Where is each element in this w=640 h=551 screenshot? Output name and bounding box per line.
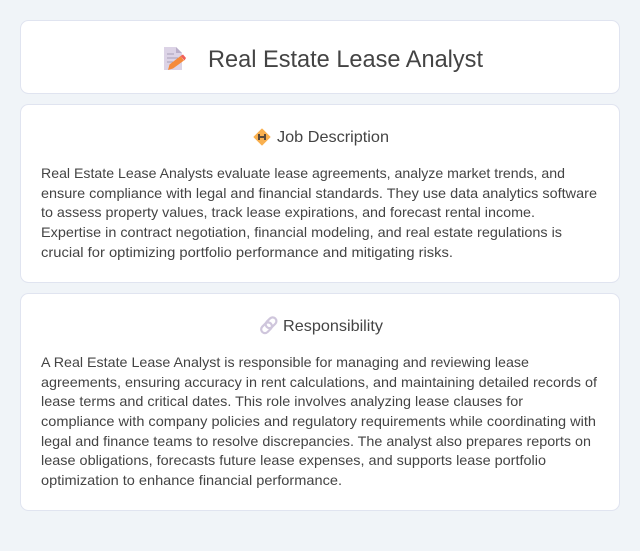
title: Real Estate Lease Analyst	[208, 46, 483, 73]
text block: job description: Real Estate Lease Analysts evaluate lease agreements, analyze market trends, and	[41, 165, 565, 181]
panel: responsibility	[20, 294, 620, 510]
icon: orange diamond	[254, 129, 270, 145]
text block: responsibility	[41, 354, 597, 488]
text block: job description: crucial for optimizing portfolio performance and mitigating risks.	[41, 244, 453, 260]
text block: responsibility: lease terms and critical dates. This role involves analyzing lease clauses for	[41, 393, 523, 409]
heading: job description: Job Description	[277, 129, 389, 146]
text block: responsibility: agreements, ensuring accuracy in rent calculations, and maintaining detailed records of	[41, 374, 597, 390]
text block: job description: to assess property values, track lease expirations, and forecast rental income.	[41, 204, 535, 220]
icon: chain link	[260, 316, 278, 335]
text block: responsibility: lease obligations, forecasts future lease expenses, and supports lease portfolio	[41, 452, 546, 468]
panel: title header	[20, 20, 620, 94]
text block: job description	[41, 165, 597, 260]
text block: job description: ensure compliance with legal and financial standards. They use data analytics software	[41, 185, 597, 201]
text block: responsibility: compliance with company policies and regulatory requirements while coordinating with	[41, 413, 596, 429]
text block: responsibility: optimization to enhance financial performance.	[41, 472, 342, 488]
icon: document with pencil	[164, 47, 186, 70]
heading: responsibility: Responsibility	[283, 318, 383, 335]
panel: job description	[20, 104, 620, 282]
text block: responsibility: A Real Estate Lease Analyst is responsible for managing and reviewing lease	[41, 354, 529, 370]
text block: job description: Expertise in contract negotiation, financial modeling, and real estate regulations is	[41, 224, 562, 240]
text block: responsibility: legal and finance teams to resolve discrepancies. The analyst also prepares reports on	[41, 433, 591, 449]
